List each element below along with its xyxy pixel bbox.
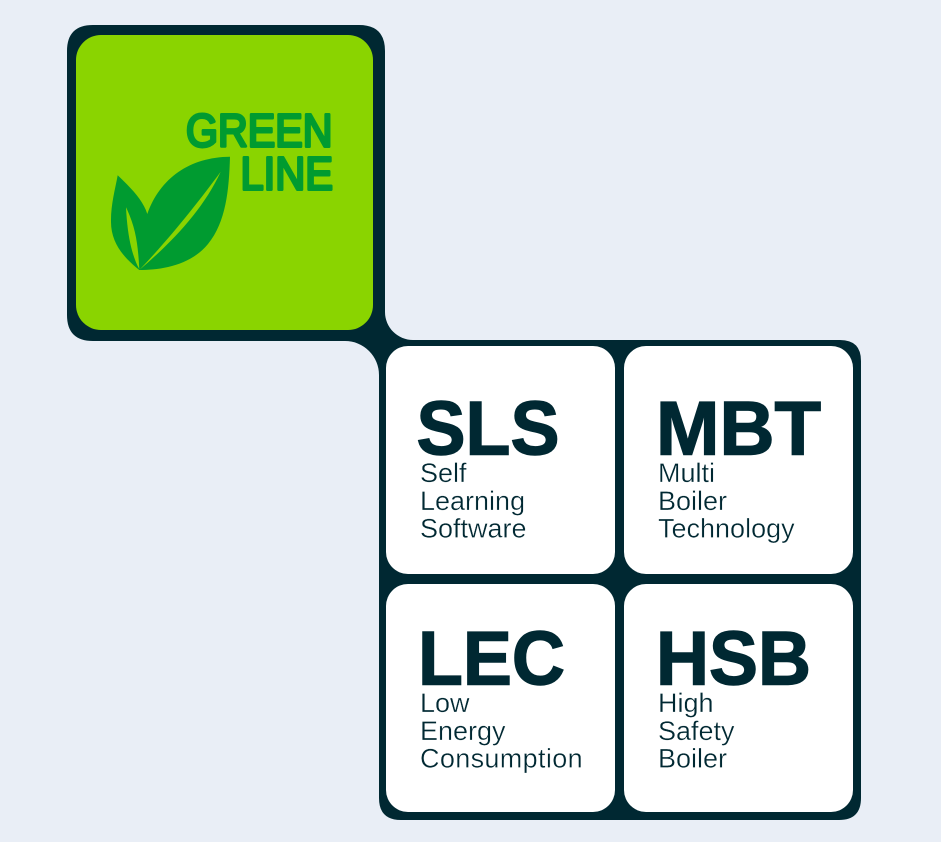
text: Multi Boiler Technology: Boiler xyxy=(658,486,727,516)
text: High Safety Boiler: Boiler xyxy=(658,744,727,774)
icon: leaf check mark xyxy=(111,157,230,270)
text: Low Energy Consumption: Consumption xyxy=(420,744,583,774)
panel: HSB xyxy=(624,584,853,812)
text: Self Learning Software: Self xyxy=(420,458,467,488)
heading: LEC: LEC xyxy=(418,616,565,701)
text: LINE: LINE xyxy=(240,148,333,200)
dark connected frame xyxy=(67,25,861,820)
text: Multi Boiler Technology: Technology xyxy=(658,514,795,544)
text: Self Learning Software: Software xyxy=(420,514,527,544)
text: High Safety Boiler: High xyxy=(658,688,714,718)
heading: MBT: MBT xyxy=(656,386,821,471)
panel: MBT xyxy=(624,346,853,574)
panel: SLS xyxy=(386,346,615,574)
text: High Safety Boiler: Safety xyxy=(658,716,735,746)
panel: LEC xyxy=(386,584,615,812)
text: Self Learning Software: Learning xyxy=(420,486,525,516)
heading: SLS: SLS xyxy=(416,386,560,471)
text: Multi Boiler Technology: Multi xyxy=(658,458,715,488)
text: Low Energy Consumption: Energy xyxy=(420,716,506,746)
heading: HSB: HSB xyxy=(656,616,811,701)
panel: Green Line logo xyxy=(76,35,373,330)
text: Low Energy Consumption: Low xyxy=(420,688,470,718)
text: GREEN: GREEN xyxy=(186,104,332,156)
